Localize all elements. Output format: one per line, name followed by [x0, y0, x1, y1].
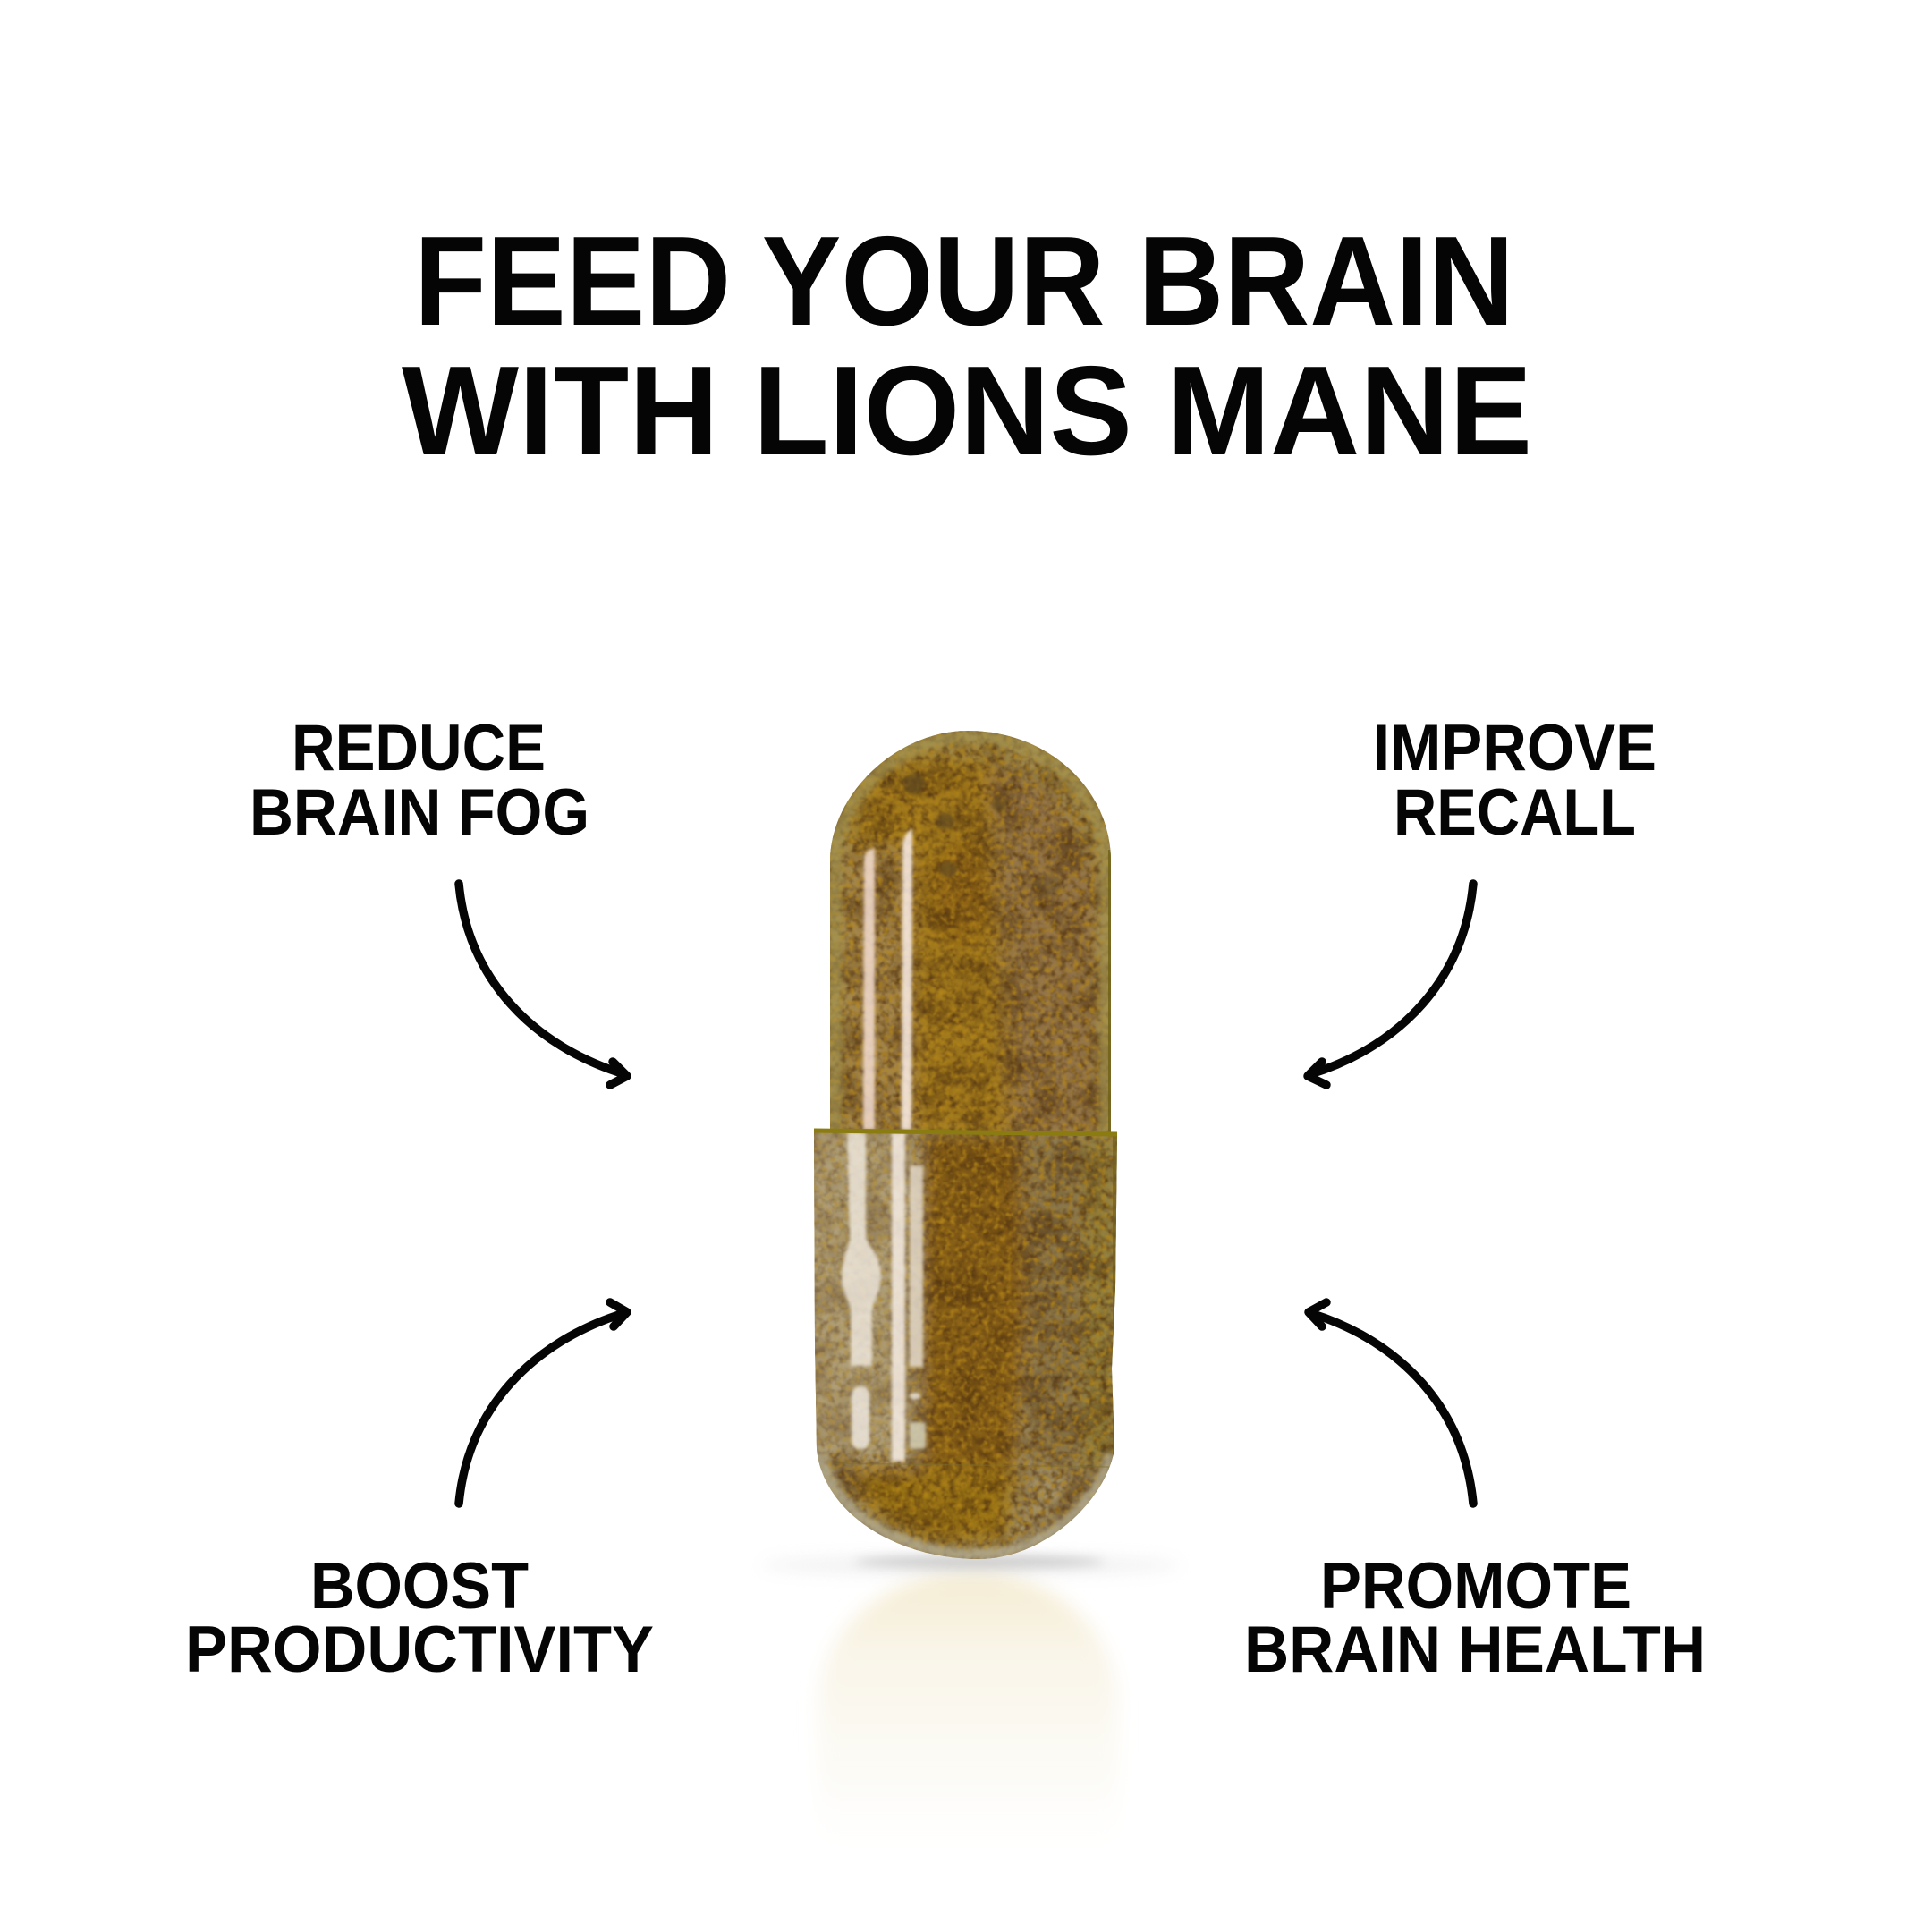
- label: boost productivity: [185, 1550, 654, 1686]
- label: reduce brain fog: REDUCE: [292, 712, 546, 784]
- label: improve recall: [1373, 712, 1657, 849]
- label: promote brain health: [1244, 1550, 1706, 1686]
- label: improve recall: RECALL: [1394, 776, 1636, 849]
- title: WITH LIONS MANE: [402, 340, 1532, 482]
- infographic canvas: [190, 236, 1701, 1778]
- arrow: top left: [459, 884, 627, 1085]
- capsule reflection: [818, 1572, 1118, 1869]
- title: FEED YOUR BRAIN: [414, 210, 1514, 352]
- lower highlights and embossed mark: [842, 1132, 926, 1462]
- label: promote brain health: BRAIN HEALTH: [1244, 1614, 1706, 1686]
- title: [402, 210, 1532, 482]
- shell rim: [835, 736, 1106, 1134]
- label: improve recall: IMPROVE: [1373, 712, 1657, 784]
- label: reduce brain fog: BRAIN FOG: [250, 776, 589, 849]
- translucent overlay on pale left zone: [805, 1118, 917, 1453]
- arrow: top right: [1308, 884, 1473, 1085]
- dark powder flecks: [903, 773, 1062, 896]
- capsule: [805, 724, 1123, 1563]
- label: boost productivity: PRODUCTIVITY: [185, 1614, 654, 1686]
- label: reduce brain fog: [250, 712, 589, 849]
- arrow: bottom right: [1309, 1302, 1473, 1504]
- bottom shell rim: [820, 1453, 1110, 1555]
- arrow: bottom left: [459, 1302, 627, 1504]
- capsule upper shell: [823, 724, 1118, 1136]
- label: boost productivity: BOOST: [310, 1550, 529, 1623]
- ground shadow: [760, 1555, 1181, 1574]
- capsule lower shell: [805, 1118, 1123, 1563]
- label: promote brain health: PROMOTE: [1320, 1550, 1631, 1623]
- upper highlights: [863, 829, 912, 1130]
- capsule seam: [814, 1131, 1117, 1134]
